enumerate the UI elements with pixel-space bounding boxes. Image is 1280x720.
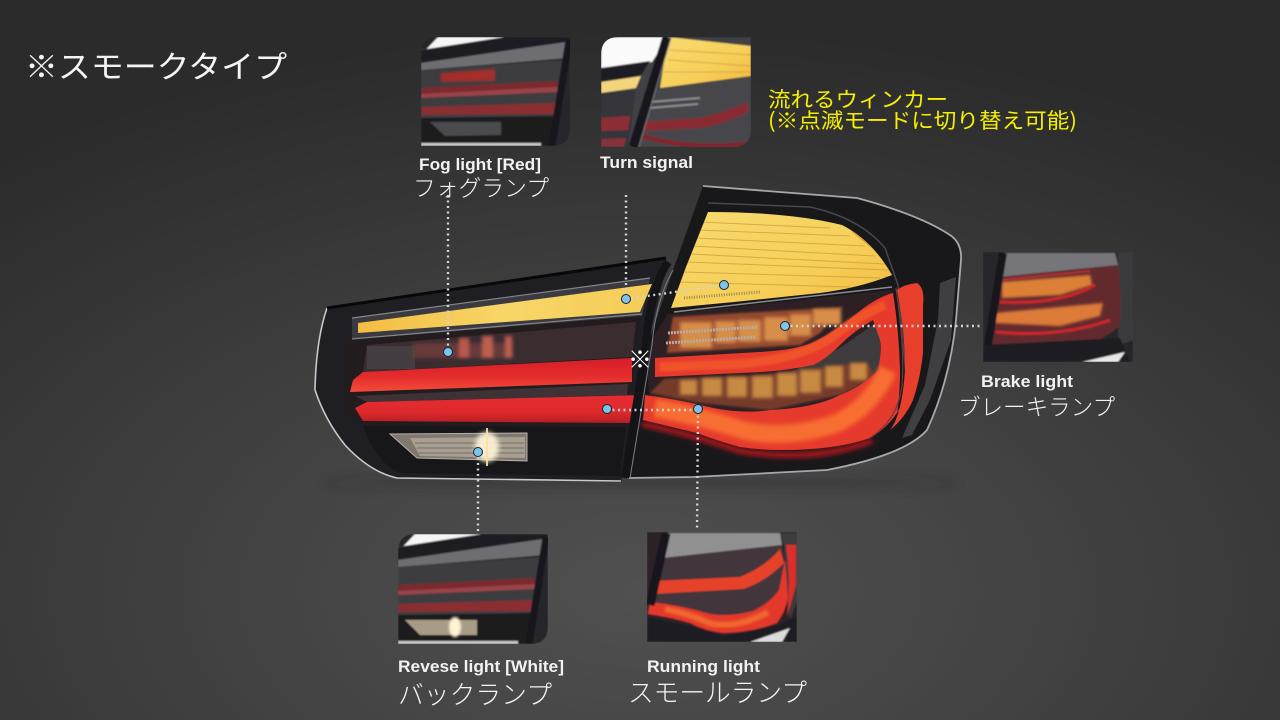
turn signal fan <box>671 212 892 308</box>
leader lines <box>448 195 982 532</box>
seam <box>625 262 668 478</box>
red glow below band <box>642 424 872 455</box>
label: brake light: ブレーキランプ <box>958 388 1115 422</box>
thumbnail: running light <box>647 532 797 642</box>
label: turn signal: Turn signal <box>600 153 693 172</box>
right fender lamp <box>627 186 961 478</box>
side hatch strip <box>902 277 956 438</box>
tail lamp assembly <box>315 186 961 482</box>
trim <box>352 278 650 341</box>
thumbnail: fog light <box>421 37 570 146</box>
dark inner lens <box>645 290 900 425</box>
label: reverse light: Revese light [White] <box>398 657 564 676</box>
lower LED <box>650 362 877 410</box>
running bar 1 <box>350 358 632 392</box>
label: running light: Running light <box>647 657 760 676</box>
running bar 2 <box>355 395 640 423</box>
DRL lines <box>666 327 758 343</box>
dark lens <box>343 316 640 427</box>
title: ※スモークタイプ <box>25 42 287 87</box>
label: reverse light: バックランプ <box>398 675 552 712</box>
label: running light <box>628 657 807 710</box>
note: flowing turn signal: 流れるウィンカー <box>768 84 948 114</box>
reverse light <box>390 433 527 461</box>
label: brake light <box>958 372 1115 422</box>
inner frame <box>708 203 908 445</box>
turn signal strip <box>358 284 652 333</box>
label: running light: スモールランプ <box>628 673 807 710</box>
thumbnail: brake light <box>983 252 1133 362</box>
fog LED <box>413 336 513 358</box>
label: reverse light <box>398 657 564 712</box>
label: fog light: Fog light [Red] <box>419 155 541 174</box>
label: brake light: Brake light <box>981 372 1073 391</box>
thumbnail: turn signal <box>601 37 751 147</box>
running bands <box>643 293 900 450</box>
note: flowing turn signal <box>768 84 1077 135</box>
center mark: ※ <box>628 340 652 375</box>
trim under fan <box>674 287 892 312</box>
label: fog light: フォグランプ <box>413 169 549 203</box>
marker dots <box>444 280 790 456</box>
upper LED <box>667 307 843 353</box>
thumbnail: reverse light <box>398 534 548 644</box>
note: flowing turn signal: (※点滅モードに切り替え可能) <box>768 105 1077 135</box>
lower black <box>363 426 626 476</box>
lamp shadow <box>320 479 960 487</box>
outer vertical band <box>890 283 923 430</box>
glare <box>475 432 499 462</box>
left trunk lamp <box>315 258 666 482</box>
